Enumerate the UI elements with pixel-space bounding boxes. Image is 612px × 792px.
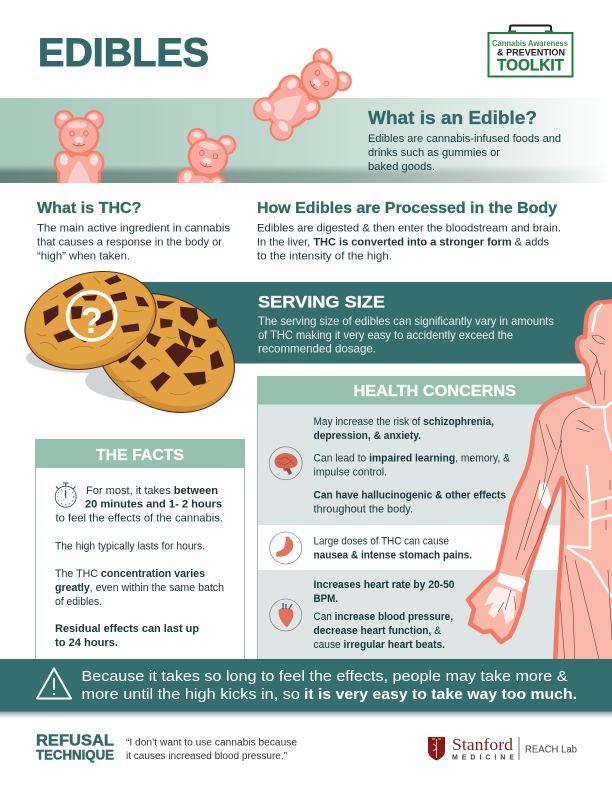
text: refusal quote xyxy=(126,738,297,762)
text: heart effects: BPM. xyxy=(314,593,338,605)
icon: warning triangle xyxy=(37,668,71,698)
text: serving size: recommended dosage. xyxy=(258,342,376,356)
text: concentration: greatly, even within the same batch xyxy=(55,582,224,594)
text: warning message xyxy=(82,669,577,703)
logo: stanford medicine reach lab: REACH Lab xyxy=(525,744,577,756)
text: thc definition: The main active ingredient in cannabis xyxy=(37,223,230,235)
panel: serving size band xyxy=(130,282,612,364)
text: warning message: more until the high kicks in, so xyxy=(82,687,300,703)
illustration: cookies with question mark xyxy=(13,256,255,436)
text: brain effects: Can lead to impaired learning, memory, & xyxy=(314,453,510,465)
text: heart effects: cause irregular heart beats. xyxy=(314,639,445,651)
panel: health concerns xyxy=(257,376,587,662)
panel: warning band xyxy=(0,659,612,718)
logo: stanford medicine reach lab: MEDICINE xyxy=(452,754,514,761)
text: how edibles are processed: to the intensity of the high. xyxy=(257,250,392,262)
icon: stopwatch xyxy=(55,483,76,507)
heading: refusal technique: TECHNIQUE xyxy=(36,748,114,763)
text: thc definition xyxy=(37,223,230,262)
cookie back xyxy=(75,270,255,436)
text: heart effects: decrease heart function, & xyxy=(314,625,441,637)
logo: toolkit: & PREVENTION xyxy=(497,48,565,58)
title: EDIBLES xyxy=(38,31,209,75)
panel: what is an edible band xyxy=(0,98,612,183)
text: warning message: Because it takes so long to feel the effects, people may take more & xyxy=(82,669,568,685)
heading: refusal technique: REFUSAL xyxy=(36,733,114,750)
panel: the facts xyxy=(35,439,245,662)
text: serving size: of THC making it very easy to accidently exceed the xyxy=(258,328,513,342)
illustration: gummy bear tilted xyxy=(176,128,236,183)
logo: toolkit xyxy=(488,26,572,76)
text: onset time: to feel the effects of the cannabis. xyxy=(56,513,223,525)
text: serving size xyxy=(258,314,554,356)
text: heart effects xyxy=(314,579,454,651)
icon: brain xyxy=(269,447,302,480)
logo: toolkit: Cannabis Awareness xyxy=(492,39,569,48)
text: onset time: 20 minutes and 1- 2 hours xyxy=(85,499,222,511)
text: thc definition: “high” when taken. xyxy=(37,250,130,262)
heading: how edibles are processed: How Edibles are Processed in the Body xyxy=(257,200,557,217)
text: concentration: of edibles. xyxy=(55,596,102,608)
illustration: gummy bear falling xyxy=(248,44,356,146)
text: stomach effects: nausea & intense stomach pains. xyxy=(314,550,472,562)
text: edible definition: drinks such as gummies or xyxy=(368,147,500,159)
text: stomach effects: Large doses of THC can cause xyxy=(314,536,449,548)
text: edible definition: baked goods. xyxy=(368,161,435,173)
text: residual effects: to 24 hours. xyxy=(55,637,118,649)
text: concentration: The THC concentration varies xyxy=(55,568,205,580)
text: how edibles are processed: In the liver, THC is converted into a stronger form & adds xyxy=(257,237,549,249)
logo: stanford medicine reach lab: Stanford xyxy=(452,735,514,754)
heading: health concerns: HEALTH CONCERNS xyxy=(354,383,516,400)
text: residual effects: Residual effects can last up xyxy=(55,623,199,635)
logo: toolkit: TOOLKIT xyxy=(497,56,564,74)
text: concentration xyxy=(55,568,224,608)
heading: serving size: SERVING SIZE xyxy=(258,292,385,311)
text: stomach effects xyxy=(314,536,472,562)
text: how edibles are processed xyxy=(257,223,561,262)
icon: question mark: ? xyxy=(81,300,103,341)
text: residual effects xyxy=(55,623,199,649)
text: brain effects: throughout the body. xyxy=(314,504,413,516)
icon: stomach xyxy=(270,532,302,564)
text: serving size: The serving size of edibles can significantly vary in amounts xyxy=(258,314,554,328)
heading: refusal technique xyxy=(36,733,114,763)
text: thc definition: that causes a response in the body or xyxy=(37,237,222,249)
text: warning message: it is very easy to take way too much. xyxy=(304,687,577,703)
text: onset time xyxy=(56,485,223,525)
logo: stanford medicine reach lab xyxy=(428,735,577,761)
text: edible definition: Edibles are cannabis-infused foods and xyxy=(368,133,561,145)
heading: what is thc: What is THC? xyxy=(37,200,142,217)
header: the facts xyxy=(35,439,245,468)
icon: question mark xyxy=(68,292,116,341)
header: health concerns xyxy=(257,376,587,404)
text: heart effects: Increases heart rate by 20-50 xyxy=(314,579,454,591)
text: onset time: For most, it takes between xyxy=(86,485,218,497)
hand and tendons xyxy=(484,304,612,624)
text: brain effects: May increase the risk of schizophrenia, xyxy=(314,416,494,428)
text: refusal quote: “I don’t want to use cannabis because xyxy=(126,738,297,749)
text: brain effects xyxy=(314,416,510,516)
text: brain effects: depression, & anxiety. xyxy=(314,430,421,442)
text: refusal quote: it causes increased blood pressure.” xyxy=(126,751,287,762)
heading: what is an edible: What is an Edible? xyxy=(368,107,537,128)
text: heart effects: Can increase blood pressure, xyxy=(314,611,453,623)
illustration: gummy bear standing xyxy=(54,110,104,183)
icon: heart xyxy=(270,599,302,631)
cookie front xyxy=(13,256,168,385)
illustration: human muscular body xyxy=(468,301,612,664)
text: duration: The high typically lasts for hours. xyxy=(55,540,205,552)
heading: the facts: THE FACTS xyxy=(96,447,184,464)
text: edible definition xyxy=(368,133,561,173)
text: brain effects: impulse control. xyxy=(314,466,387,478)
text: brain effects: Can have hallucinogenic & other effects xyxy=(314,490,506,502)
text: how edibles are processed: Edibles are digested & then enter the bloodstream and brain. xyxy=(257,223,561,235)
